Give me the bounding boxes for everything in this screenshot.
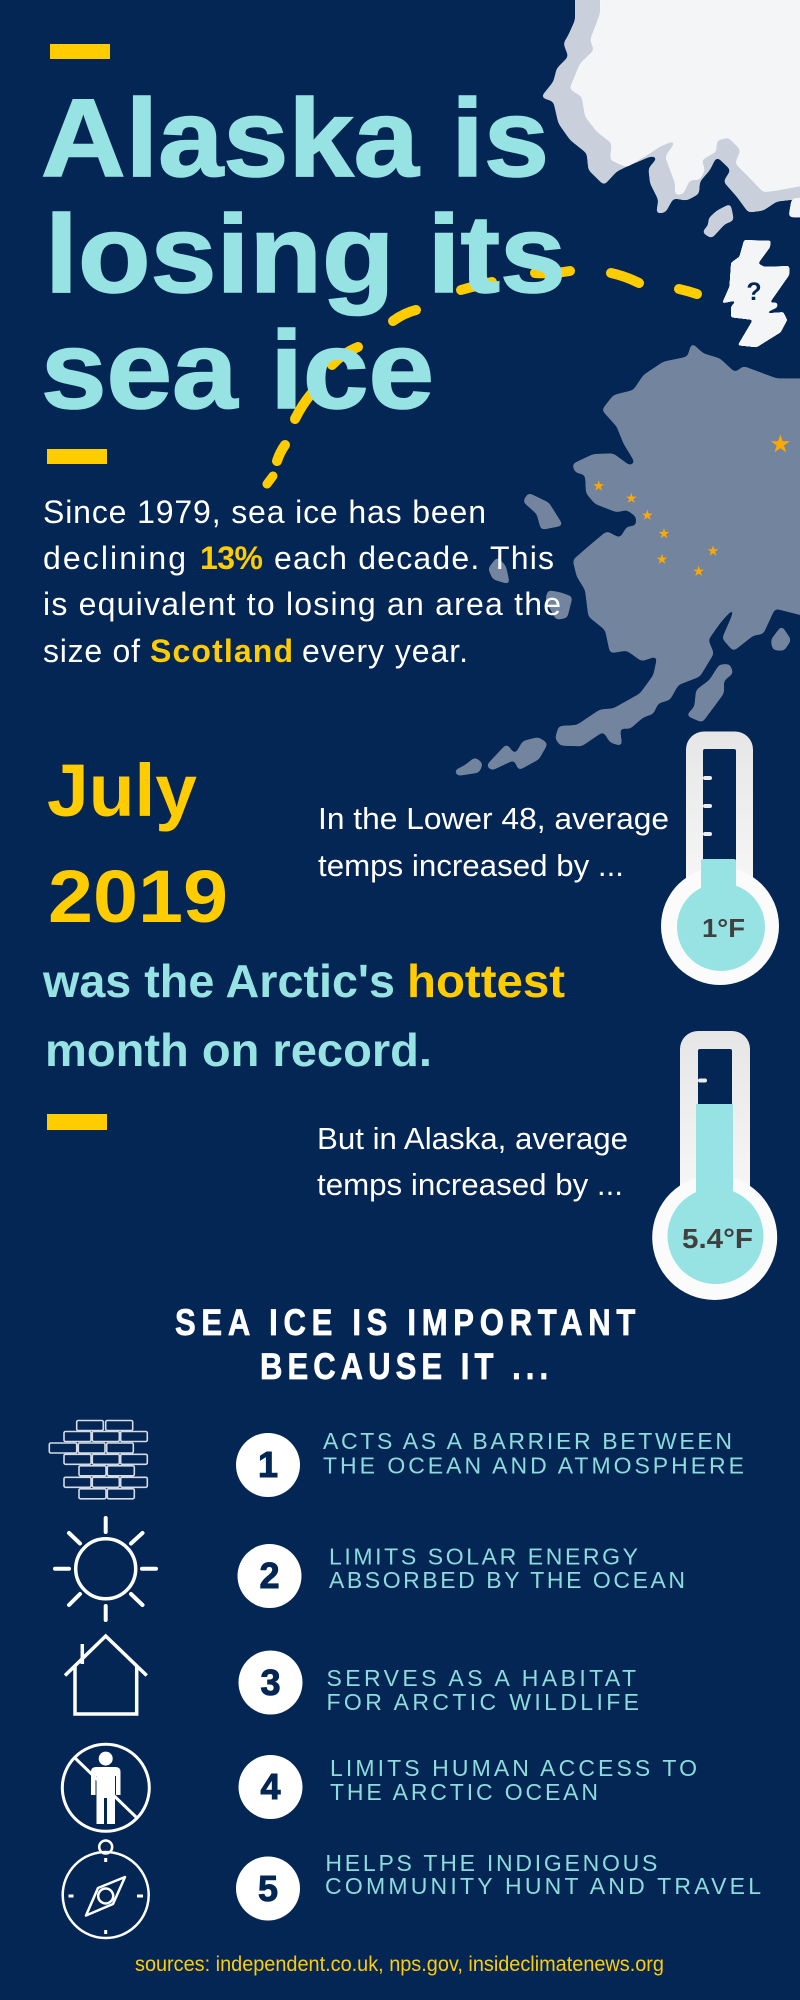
big date: July 2019: July (47, 749, 197, 832)
list item 5 (236, 1850, 761, 1920)
list item 3 (238, 1650, 639, 1715)
list item 4: 4 (260, 1766, 281, 1807)
heading: importance: BECAUSE IT ... (260, 1347, 548, 1388)
text: Alaska temps: But in Alaska, average (317, 1121, 628, 1156)
paragraph: sea ice decline: size of (43, 633, 140, 669)
text: Alaska temps: temps increased by ... (317, 1167, 623, 1202)
title: losing its (45, 193, 566, 316)
list item 2 (238, 1544, 685, 1608)
map: Scotland with question mark: ? (746, 278, 762, 306)
text: Lower 48 temps: In the Lower 48, average (318, 801, 669, 836)
icon: compass (63, 1840, 149, 1938)
thermometer: 5.4 degrees (652, 1031, 777, 1300)
text: Lower 48 temps (318, 801, 669, 883)
thermometer: 1 degree: 1°F (702, 913, 745, 943)
thermometer: 5.4 degrees: 5.4°F (682, 1223, 753, 1254)
list item 5: COMMUNITY HUNT AND TRAVEL (325, 1873, 761, 1899)
list item 5: 5 (258, 1868, 278, 1909)
list item 5: HELPS THE INDIGENOUS (325, 1850, 657, 1876)
statement: hottest month: hottest (407, 955, 565, 1007)
arrow: dashed path from Alaska to Scotland (267, 271, 697, 484)
list item 1: THE OCEAN AND ATMOSPHERE (323, 1452, 744, 1478)
big date: July 2019 (47, 749, 228, 938)
map: Alaska with islands and flag stars (454, 343, 800, 776)
map: Scotland with question mark (722, 240, 789, 347)
accent bar: top (50, 44, 110, 59)
list item 2: ABSORBED BY THE OCEAN (329, 1567, 685, 1593)
title: sea ice (41, 309, 434, 432)
accent bar: below title (47, 449, 107, 464)
thermometer: 1 degree (661, 732, 779, 985)
statement: hottest month (42, 955, 565, 1076)
list item 1: ACTS AS A BARRIER BETWEEN (323, 1428, 732, 1454)
list item 4: LIMITS HUMAN ACCESS TO (330, 1755, 697, 1781)
statement: hottest month: was the Arctic's (42, 955, 395, 1007)
paragraph: sea ice decline: Scotland (150, 633, 293, 669)
text: Lower 48 temps: temps increased by ... (318, 848, 624, 883)
paragraph: sea ice decline: each decade. This (274, 540, 554, 576)
icon: brick wall (49, 1420, 147, 1499)
heading: importance: SEA ICE IS IMPORTANT (175, 1303, 635, 1344)
list item 1 (236, 1428, 744, 1497)
icon: sun (55, 1518, 156, 1620)
paragraph: sea ice decline: Since 1979, sea ice has been (43, 494, 486, 530)
title: Alaska is (41, 77, 549, 200)
heading: importance (175, 1303, 635, 1388)
list item 4: THE ARCTIC OCEAN (330, 1779, 598, 1805)
icon: house (65, 1636, 147, 1714)
sources: sources: independent.co.uk, nps.gov, insideclimatenews.org (135, 1953, 664, 1976)
map: Russia coastline with ice shading (541, 0, 800, 239)
big date: July 2019: 2019 (48, 855, 228, 938)
text: Alaska temps (317, 1121, 628, 1202)
paragraph: sea ice decline: is equivalent to losing an area the (43, 586, 561, 622)
list item 3: SERVES AS A HABITAT (326, 1665, 636, 1691)
paragraph: sea ice decline: every year. (302, 633, 468, 669)
list item 3: 3 (260, 1662, 281, 1703)
paragraph: sea ice decline: 13% (200, 540, 263, 576)
list item 2: LIMITS SOLAR ENERGY (329, 1544, 638, 1570)
statement: hottest month: month on record. (45, 1024, 432, 1076)
paragraph: sea ice decline (43, 494, 561, 669)
list item 1: 1 (258, 1444, 278, 1485)
list item 3: FOR ARCTIC WILDLIFE (326, 1689, 639, 1715)
list item 2: 2 (259, 1555, 280, 1596)
list item 4 (238, 1755, 697, 1819)
icon: no humans (62, 1744, 149, 1831)
title (41, 77, 566, 432)
paragraph: sea ice decline: declining (43, 540, 186, 576)
accent bar: below statement (47, 1114, 107, 1130)
